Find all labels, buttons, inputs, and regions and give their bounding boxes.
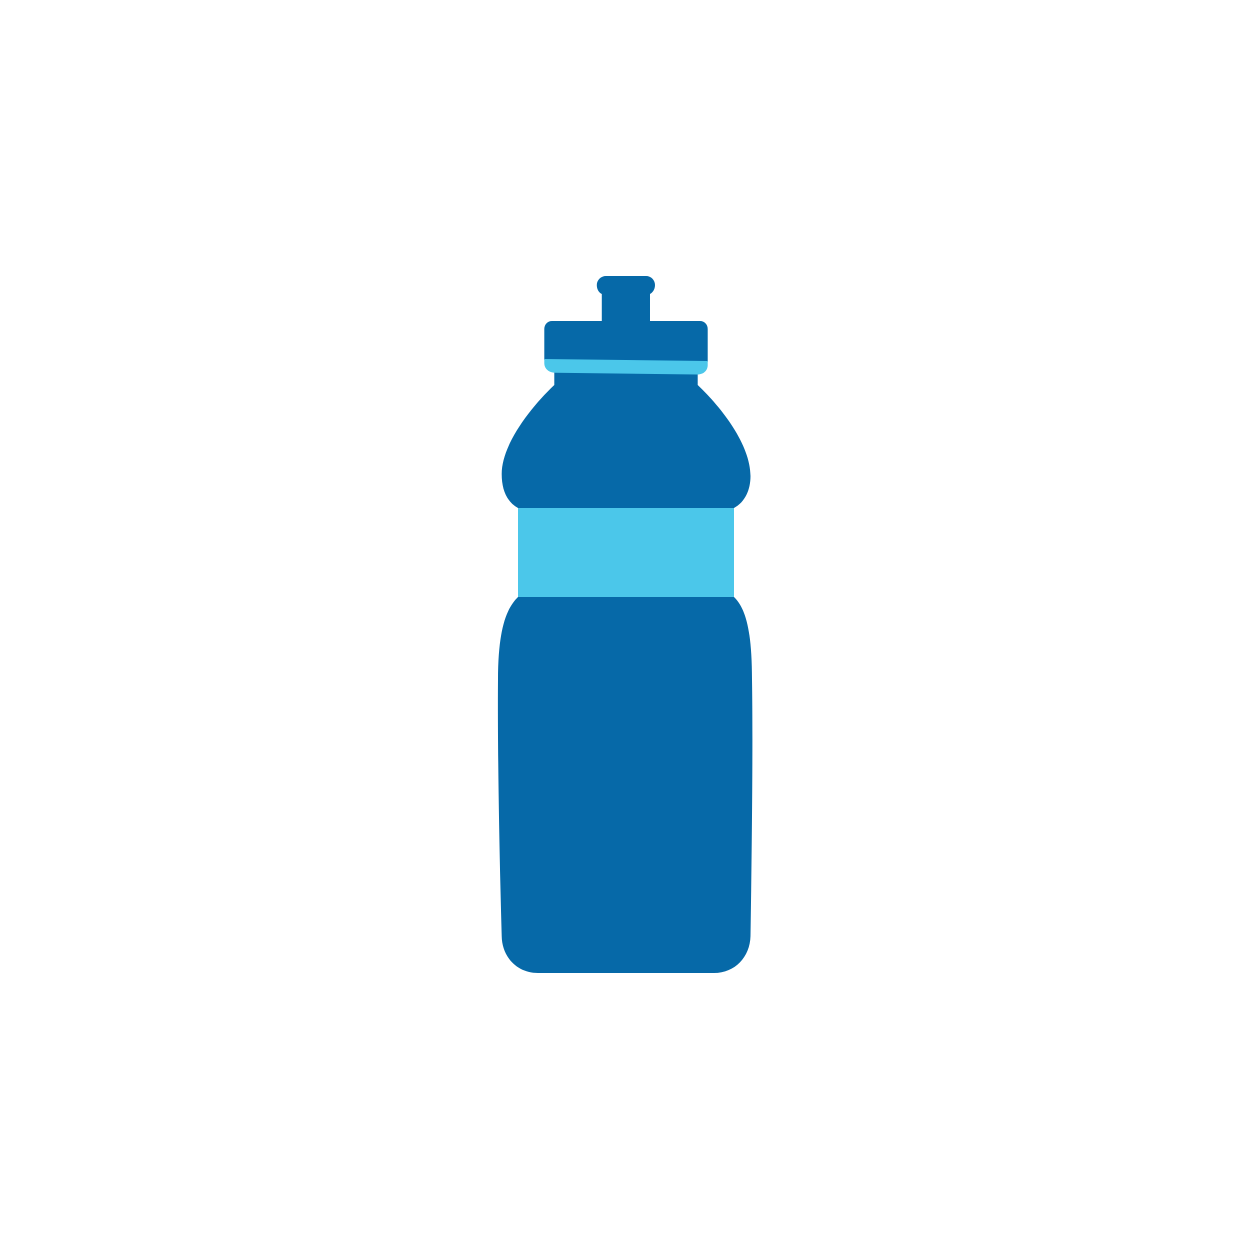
cap light blue rim xyxy=(544,359,708,374)
light blue label band xyxy=(518,500,734,604)
bottle shoulder and neck xyxy=(502,365,750,508)
spout xyxy=(597,276,655,323)
cap xyxy=(544,321,708,362)
bottle lower body xyxy=(498,597,752,973)
